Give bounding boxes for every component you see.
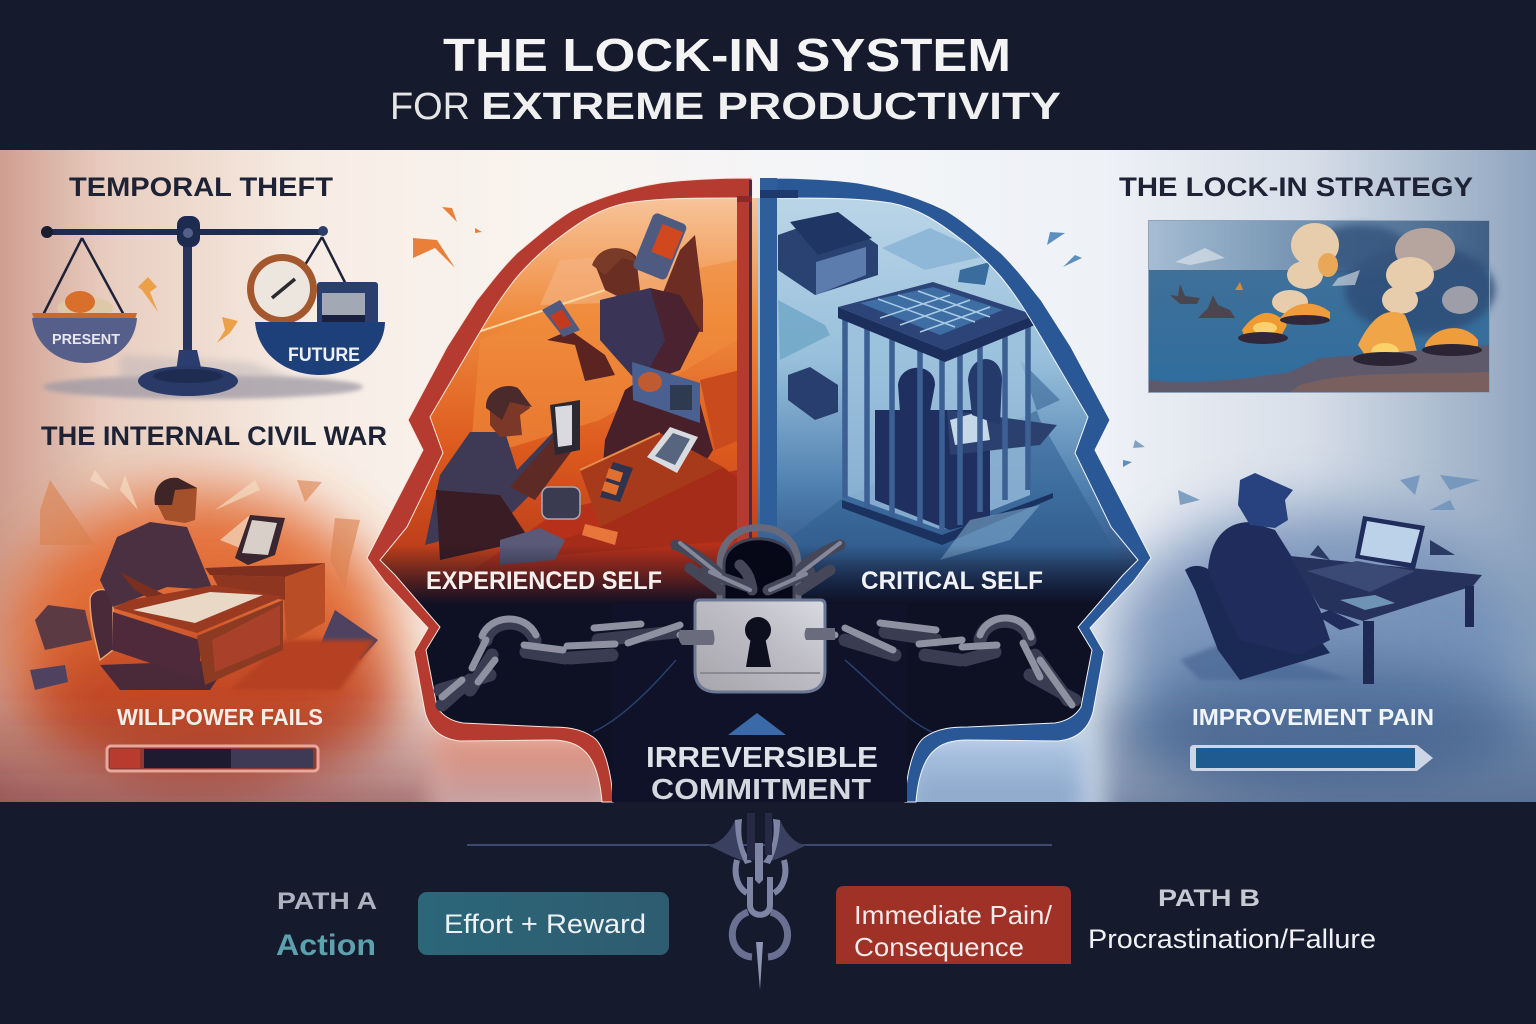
head: right blue half: [756, 178, 1156, 814]
box: immediate pain: Consequence: [854, 932, 1024, 962]
box: immediate pain: Immediate Pain/: [854, 900, 1053, 930]
label: experienced self: EXPERIENCED SELF: [426, 567, 662, 595]
icon: up triangle: [728, 713, 786, 735]
heading: temporal theft: TEMPORAL THEFT: [69, 172, 334, 202]
icon: padlock with chains: [676, 528, 840, 692]
central dark column: [612, 604, 907, 802]
label: path a: PATH A: [277, 888, 377, 915]
panel: internal civil war: [30, 421, 387, 771]
label: irreversible commitment: [646, 742, 878, 806]
panel: lock-in strategy: [1119, 172, 1495, 392]
middle panel background: [0, 143, 1536, 840]
panel: path a: [276, 888, 669, 962]
progress bar: willpower: [107, 746, 318, 771]
label: willpower fails: WILLPOWER FAILS: [117, 704, 323, 730]
icon: future bowl: [247, 254, 385, 375]
heading: lock-in strategy: THE LOCK-IN STRATEGY: [1119, 172, 1473, 202]
box: immediate pain: [836, 886, 1071, 964]
icon: present bowl: [32, 291, 137, 363]
bottom divider: [467, 844, 1052, 846]
title: THE LOCK-IN SYSTEM: [443, 29, 1011, 81]
progress arrow: [1190, 745, 1433, 771]
label: irreversible commitment: COMMITMENT: [651, 774, 871, 806]
icon: confetti right: [1047, 232, 1132, 467]
label: procrastination/failure: Procrastination/Fallure: [1088, 924, 1376, 954]
desk and devices: [500, 427, 740, 565]
panel: improvement pain: [1133, 440, 1482, 771]
icon: chain pendant: [707, 813, 807, 990]
label: improvement pain: IMPROVEMENT PAIN: [1192, 704, 1434, 730]
label: action: Action: [276, 929, 376, 962]
chains: [440, 618, 1075, 705]
figure: seated man with phone: [425, 386, 580, 560]
icon: small box: [788, 367, 838, 420]
label: critical self: CRITICAL SELF: [861, 567, 1043, 595]
icon: balance scale: [32, 216, 385, 399]
red head outline: [367, 178, 752, 802]
icon: person at laptop: [1133, 440, 1482, 684]
blue head outline: [766, 178, 1151, 802]
panel: temporal theft: [32, 172, 385, 399]
panel: path b: [836, 885, 1376, 964]
box: effort + reward: [418, 892, 669, 955]
head: left red half: [360, 178, 760, 814]
box: effort + reward: Effort + Reward: [444, 909, 646, 939]
title: FOR: [390, 86, 470, 128]
title: [390, 29, 1061, 128]
icon: future bowl: FUTURE: [288, 345, 360, 366]
icon: cage: [838, 282, 1057, 545]
title: EXTREME PRODUCTIVITY: [481, 86, 1061, 128]
image: burning ships: [1148, 220, 1495, 392]
figure: standing man with phones: [542, 213, 713, 458]
icon: confetti left: [413, 207, 482, 268]
label: irreversible commitment: IRREVERSIBLE: [646, 742, 878, 774]
icon: person at desk: [30, 470, 378, 690]
icon: lightning sparks: [138, 277, 238, 343]
icon: present bowl: PRESENT: [52, 331, 120, 348]
icon: file box: [778, 212, 878, 295]
label: path b: PATH B: [1158, 885, 1260, 912]
heading: internal civil war: THE INTERNAL CIVIL WAR: [41, 421, 387, 451]
